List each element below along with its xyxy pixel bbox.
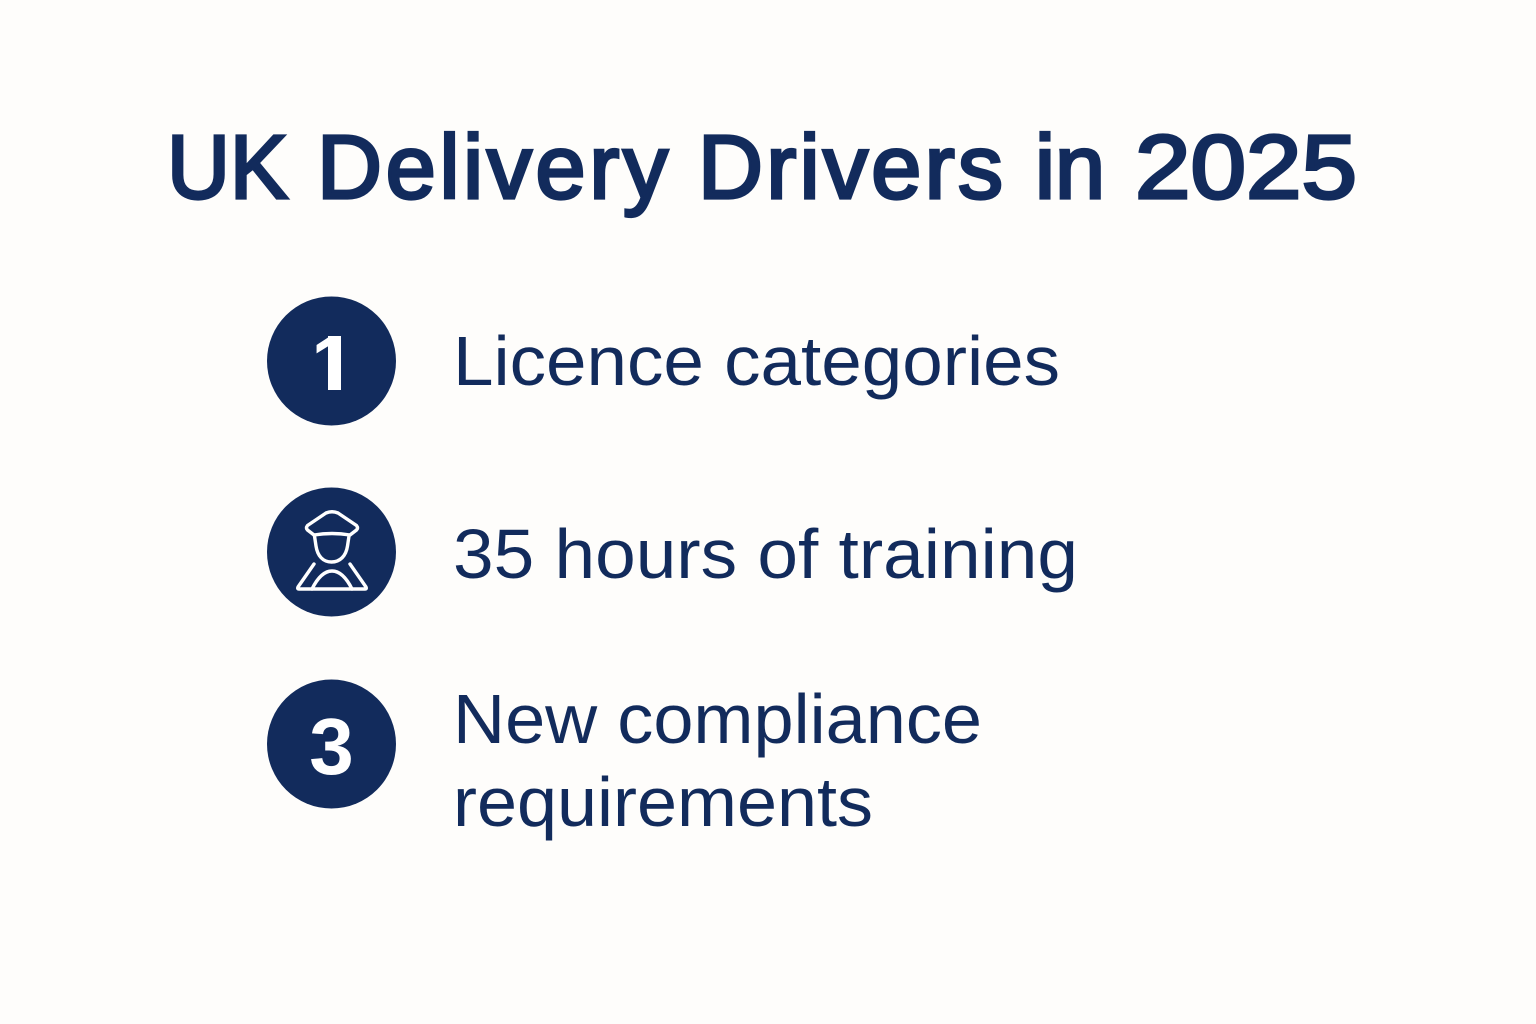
title <box>167 118 1357 218</box>
title: UK <box>167 118 288 218</box>
list item 1: licence categories <box>267 296 1060 426</box>
list item 3: compliance requirements <box>267 680 982 841</box>
label: new compliance requirements <box>453 680 982 841</box>
badge: number 1 <box>267 296 396 426</box>
label: new compliance requirements: requirements <box>453 763 873 841</box>
title: Drivers <box>698 118 1003 218</box>
label: 35 hours of training: 35 hours of training <box>453 515 1078 593</box>
badge: driver icon <box>267 488 396 616</box>
title: 2025 <box>1135 118 1357 218</box>
badge: number 3 <box>267 680 396 808</box>
label: licence categories: Licence categories <box>453 322 1060 400</box>
title: in <box>1035 118 1105 218</box>
badge: number 3: 3 <box>309 702 354 791</box>
title: Delivery <box>317 118 668 218</box>
list item 2: training hours <box>267 488 1078 616</box>
badge: number 1: 1 <box>311 319 355 407</box>
label: new compliance requirements: New compliance <box>453 680 982 758</box>
